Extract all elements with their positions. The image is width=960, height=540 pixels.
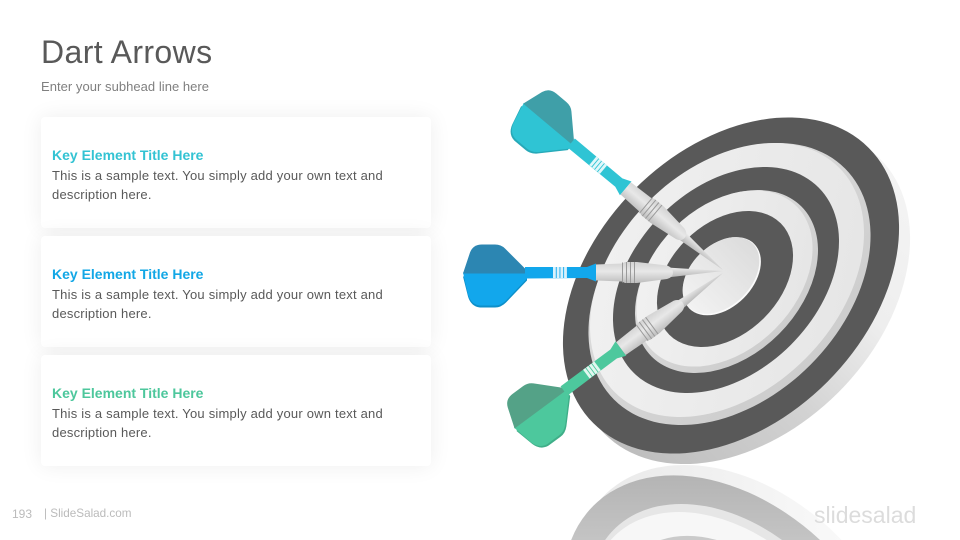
dart: blue [463,244,723,308]
middle dark ring [569,123,883,437]
page number: 193 [12,507,32,521]
text: key element 1: description here. [52,187,152,202]
bullseye [667,222,776,331]
text: key element 3: This is a sample text. You simply add your own text and [52,406,383,421]
text: key element 1: This is a sample text. You simply add your own text and [52,168,383,183]
text: key element 1 [52,168,383,202]
text: key element 2: description here. [52,306,152,321]
subhead: Enter your subhead line here [41,79,209,94]
heading: key element 2: Key Element Title Here [52,266,203,282]
panel: key element 2 [41,236,431,347]
board side edge [508,62,960,530]
light ring 1 [533,88,926,480]
board reflection [571,465,842,540]
outer dark ring [497,51,960,520]
panel: key element 3 [41,355,431,466]
text: key element 2 [52,287,383,321]
heading: key element 3: Key Element Title Here [52,385,203,401]
dartboard [497,51,960,530]
dart: green [497,250,744,456]
light ring 2 [599,154,854,409]
panel: key element 1 [41,117,431,228]
title: Dart Arrows [41,34,213,70]
footer site name: | SlideSalad.com [44,507,132,520]
text: key element 2: This is a sample text. You simply add your own text and [52,287,383,302]
dart: teal [501,81,741,297]
heading: key element 1: Key Element Title Here [52,147,203,163]
text: key element 3: description here. [52,425,152,440]
logo wordmark: slidesalad [814,502,916,528]
text: key element 3 [52,406,383,440]
inner dark ring [630,184,820,374]
